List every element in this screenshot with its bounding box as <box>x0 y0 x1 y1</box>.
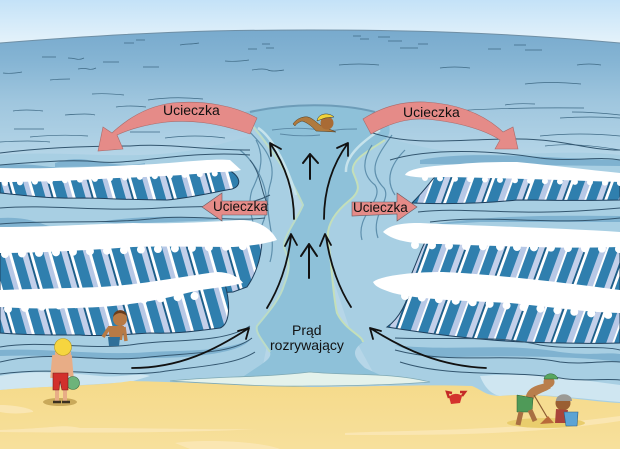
children building sand castle <box>507 374 585 428</box>
label: rip current: rozrywający <box>270 337 344 353</box>
darker water bands <box>0 155 620 362</box>
arrow: escape upper left: Ucieczka <box>163 102 220 118</box>
wave: lower left <box>0 272 243 335</box>
distant ripples <box>0 36 620 150</box>
sand beach <box>0 381 620 449</box>
wave: upper right <box>405 162 620 204</box>
child in water <box>103 310 127 346</box>
crab <box>447 392 465 404</box>
arrow: escape upper right <box>363 102 518 149</box>
rip current channel <box>235 105 405 382</box>
child on shore with ball <box>43 338 80 406</box>
swell lines left <box>0 145 270 224</box>
shore foam <box>170 372 430 386</box>
arrow: escape middle left <box>202 193 268 221</box>
wave: middle left <box>0 220 277 295</box>
arrow: escape middle left: Ucieczka <box>213 199 268 214</box>
arrow: escape upper left <box>98 102 257 151</box>
arrow: escape middle right <box>352 193 417 221</box>
arrows: central up flow <box>301 154 318 278</box>
swimmer <box>272 114 357 136</box>
wave: middle right <box>383 223 620 298</box>
swell lines right <box>370 132 620 222</box>
sand highlights <box>0 405 620 449</box>
near water, side zones <box>0 132 300 390</box>
near-shore swell lines <box>0 326 620 380</box>
sky <box>0 0 620 45</box>
label: rip current: Prąd <box>292 322 322 338</box>
wave: lower right <box>373 272 620 343</box>
arrows: rip current flow right side <box>320 143 486 368</box>
arrow: escape upper right: Ucieczka <box>403 104 460 120</box>
wave: upper left <box>0 160 241 200</box>
pale water near shore <box>0 372 620 402</box>
arrow: escape middle right: Ucieczka <box>353 200 408 215</box>
arrows: rip current flow left side <box>132 143 297 368</box>
